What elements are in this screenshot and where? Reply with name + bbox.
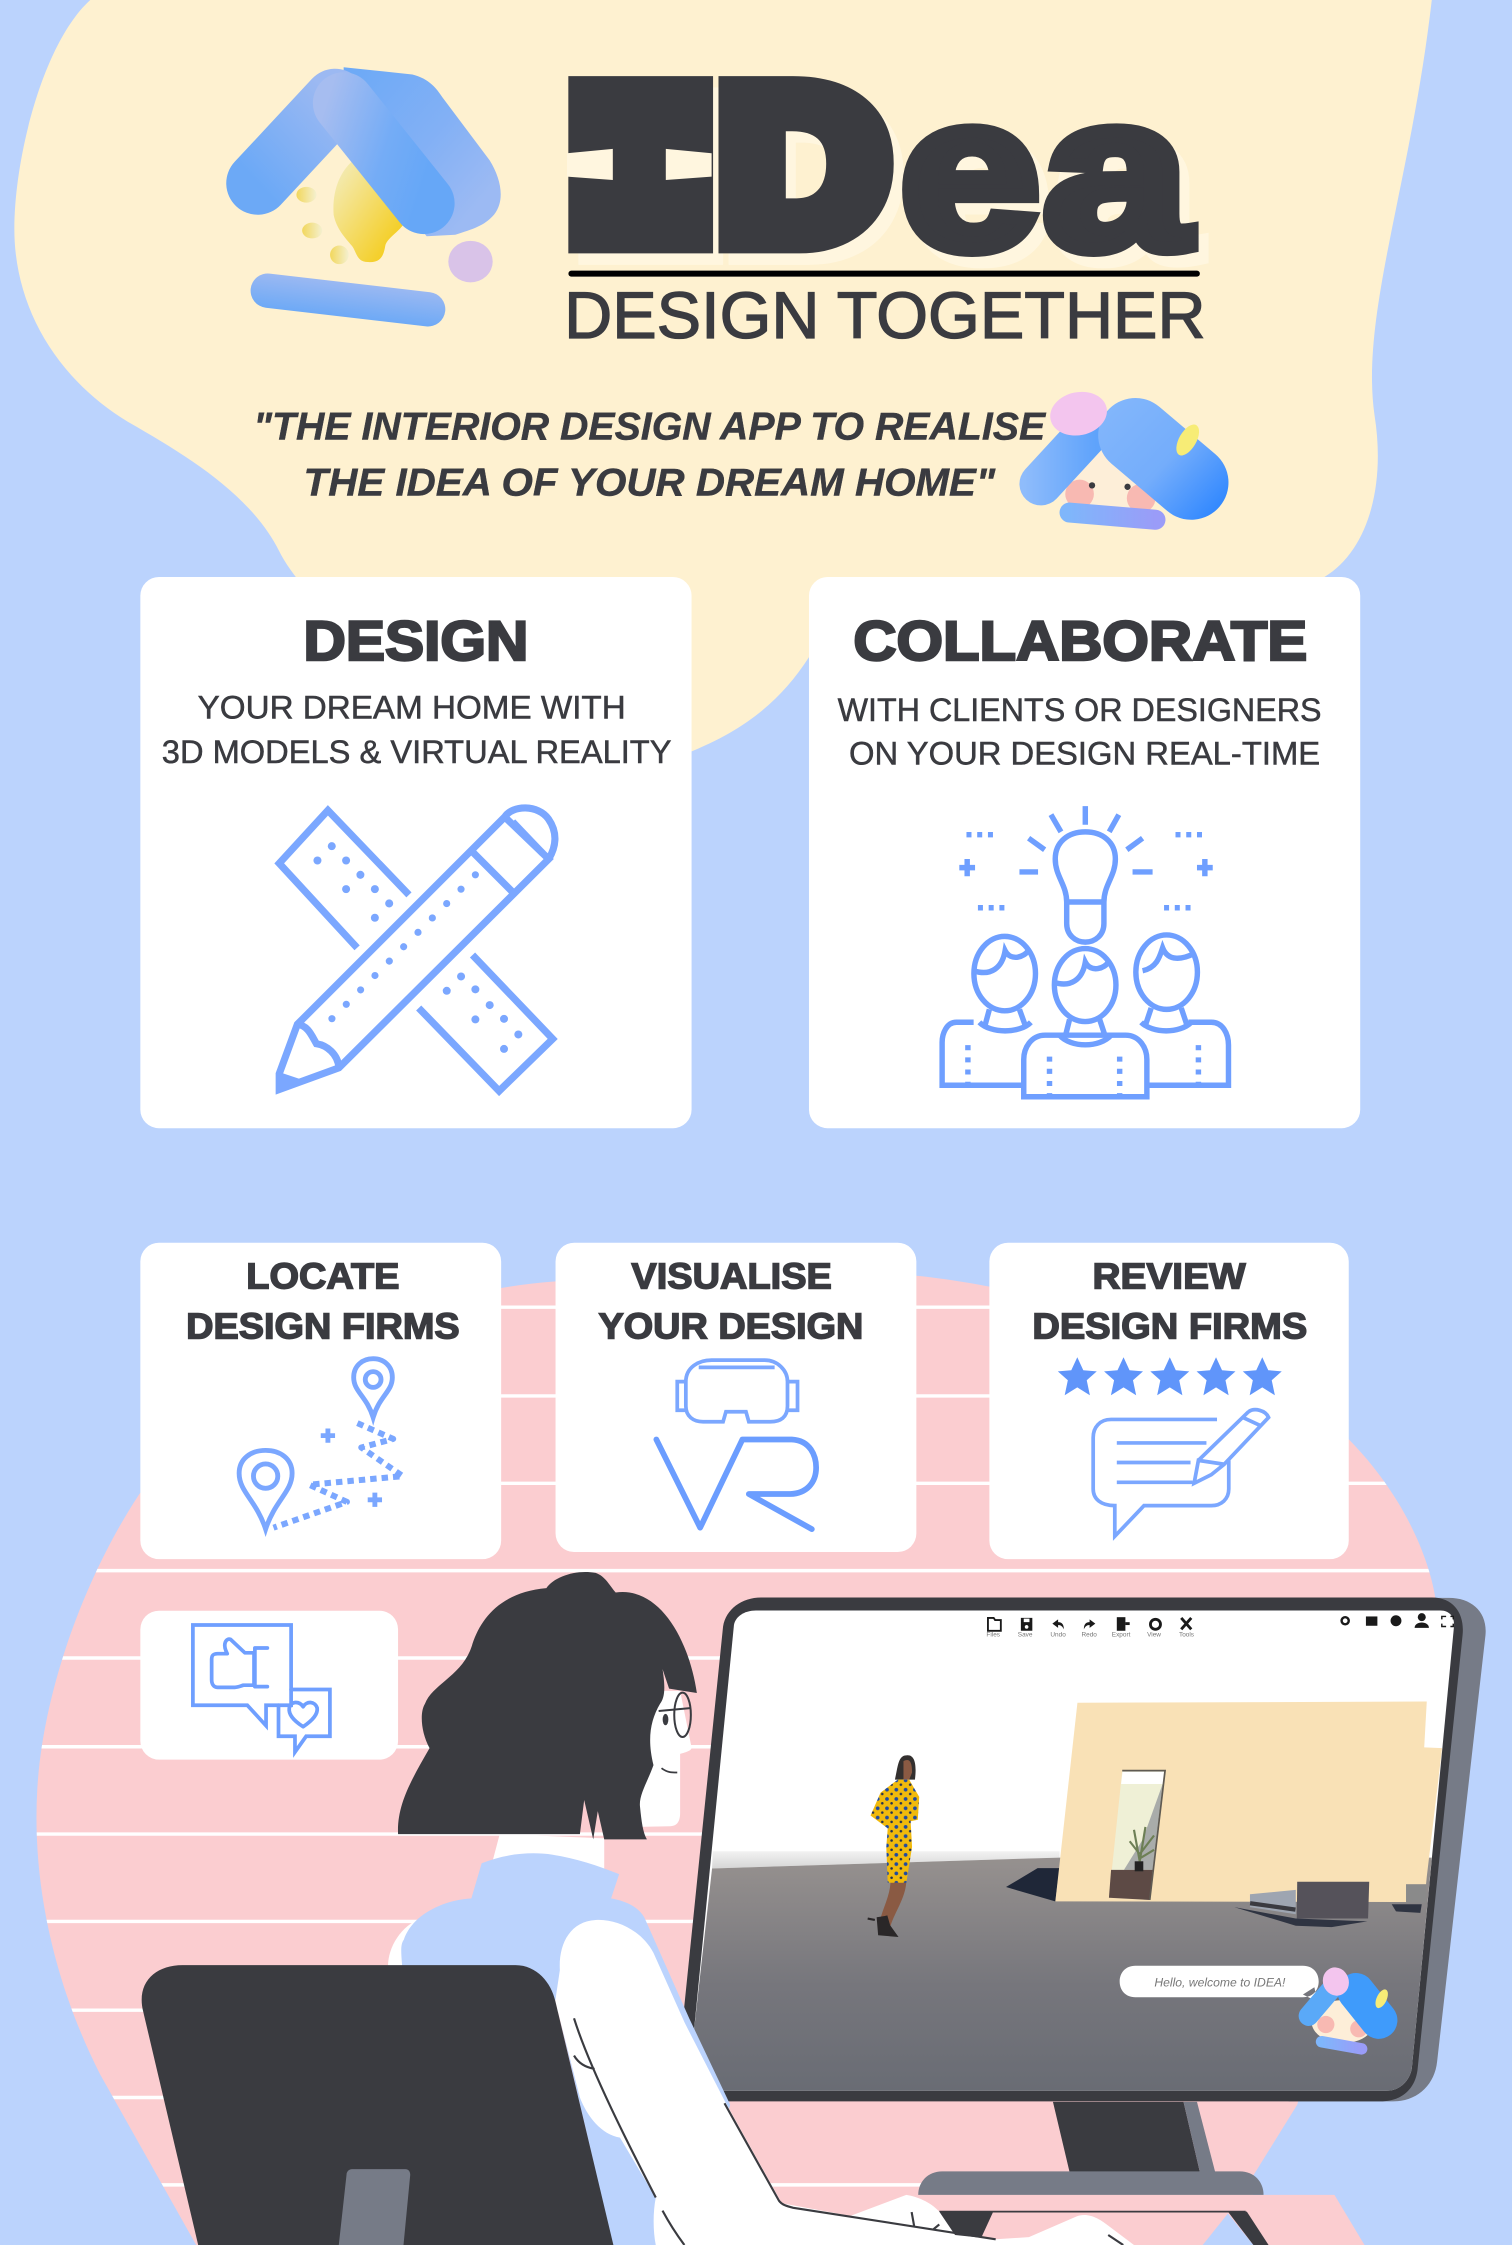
desk underside [939,2212,993,2245]
title: IDea wordmark [501,20,1201,320]
figure hair [895,1755,916,1780]
figure shoes [868,1916,896,1936]
description: 3D MODELS & VIRTUAL REALITY [162,734,672,770]
notches of the I [567,149,712,180]
cream header blob [14,0,1432,765]
horizon [712,1851,1060,1868]
mouth [662,1768,677,1773]
description [162,690,672,770]
card background [140,577,692,1128]
wordmark letters: e [901,52,1039,295]
toolbar: Tools [1179,1632,1194,1639]
logo left band [258,100,335,183]
description: WITH CLIENTS OR DESIGNERS [838,692,1322,728]
wordmark letters: D [720,46,886,283]
card background [556,1243,916,1552]
wordmark letters: I [501,20,780,308]
panel: likes [140,1611,398,1760]
mascot eyes [1089,482,1131,490]
illustration: desk and monitor stand [918,2102,1269,2245]
logo front band [344,103,424,203]
figure dress [871,1780,919,1883]
heading: YOUR DESIGN [599,1307,863,1347]
mascot pink hat [1046,387,1111,441]
heading [186,1257,460,1347]
icon: speech bubble with pencil [1093,1410,1269,1536]
desk leg [1228,2212,1269,2245]
icon: VR letters [656,1439,816,1529]
monitor frame [682,1598,1463,2101]
person face [636,1691,692,1827]
ruler [279,810,553,1091]
card background [989,1243,1349,1559]
icon: ruler and pencil [278,808,555,1093]
speech bubble: Hello, welcome to IDEA! [1154,1976,1286,1990]
panel: visualise your design [556,1243,916,1552]
panel: review design firms [989,1243,1349,1559]
wordmark shadow: I [511,32,790,320]
icon: mini mascot [1309,1964,1390,2049]
card background [809,577,1360,1128]
illustration: person at desk [388,1572,1134,2245]
heading: DESIGN FIRMS [1032,1307,1307,1347]
mascot right arm [1135,435,1191,483]
glasses [659,1693,691,1737]
toolbar: Files [986,1632,1000,1639]
panel: design [140,577,692,1128]
heading: LOCATE [246,1257,399,1297]
person left sleeve [388,1918,430,1966]
card background [140,1243,501,1559]
stand side [1184,2102,1215,2172]
figure in yellow dress [868,1755,919,1936]
mascot cheeks [1065,480,1155,513]
heading [1032,1257,1307,1347]
sparkle dots [966,835,1207,908]
quote text [253,405,1047,504]
description [838,692,1322,772]
arm contour lines [574,2018,1123,2245]
quote text: THE IDEA OF YOUR DREAM HOME" [304,460,996,504]
icon: app logo [258,67,501,309]
wall [1055,1702,1442,1902]
right gap beneath desk [1203,2214,1253,2245]
description: ON YOUR DESIGN REAL-TIME [849,736,1320,772]
logo bulb [333,155,407,262]
stand base [918,2171,1264,2195]
toolbar: Export [1112,1632,1131,1639]
side table [1406,1884,1426,1903]
dots [332,875,475,1019]
toolbar: Redo [1081,1632,1097,1639]
heading: REVIEW [1092,1257,1246,1297]
heading [599,1257,863,1347]
wall shadow [1006,1868,1060,1901]
pencil [279,808,555,1090]
wordmark shadow: e [911,63,1050,306]
logo purple dot [448,241,493,282]
mascot yellow clip [1172,421,1204,459]
toolbar: Save [1018,1632,1033,1639]
heading: VISUALISE [631,1257,832,1297]
logo dots [296,187,349,264]
person hair [398,1572,697,1839]
mascot bar [1070,513,1155,520]
wordmark shadow: D [730,57,896,294]
person shirt [401,1853,730,2245]
toolbar: View [1147,1632,1161,1639]
quote text: "THE INTERIOR DESIGN APP TO REALISE [253,405,1047,449]
icon: VR headset [677,1360,798,1422]
screen white area [694,1610,1454,2091]
wordmark shadow [511,32,1201,320]
screen [694,1610,1454,2091]
icon: team and idea bulb [942,806,1228,1097]
bulb [1055,832,1115,942]
panel: collaborate [809,577,1360,1128]
logo bar [268,291,428,309]
heading: COLLABORATE [853,609,1307,672]
chair back [142,1965,613,2245]
doorway [1109,1771,1165,1900]
plant [1130,1827,1154,1861]
person heads [974,935,1197,1022]
figure skin [879,1760,912,1926]
icon: map pins and route [239,1359,403,1529]
toolbar [986,1613,1453,1639]
tagline: DESIGN TOGETHER [564,278,1206,352]
mascot face [1055,444,1158,521]
heading: DESIGN FIRMS [186,1307,460,1347]
toolbar: Undo [1050,1632,1066,1639]
icon: thumbs up bubble [193,1625,291,1726]
eye [663,1714,668,1725]
icon: five stars [1058,1357,1282,1395]
people bodies [942,1022,1228,1085]
floor [694,1858,1432,2091]
rays [959,806,1213,876]
illustration: chair [142,1965,613,2245]
speech bubble [1120,1966,1319,2002]
icon: heart bubble [279,1689,330,1752]
card background [140,1611,398,1760]
illustration: monitor [682,1598,1486,2101]
heading: DESIGN [304,609,528,672]
monitor back [1289,1598,1486,2101]
pink backdrop blob with stripes [0,1272,1512,2245]
icon: mascot [1041,387,1204,521]
wordmark letters: a [1044,52,1191,295]
chair handle [339,2169,410,2245]
bed and sofa [1234,1882,1369,1927]
logo back band [344,67,501,236]
person neck [493,1834,604,1874]
person arm and torso [555,1920,1134,2245]
stand front [1053,2102,1200,2172]
right floor shadow [1392,1904,1422,1913]
wordmark letters [501,20,1191,308]
wordmark shadow: a [1054,63,1201,306]
panel: locate design firms [140,1243,501,1559]
mascot left arm [1041,430,1091,484]
title underline [568,271,1200,277]
description: YOUR DREAM HOME WITH [198,690,626,726]
